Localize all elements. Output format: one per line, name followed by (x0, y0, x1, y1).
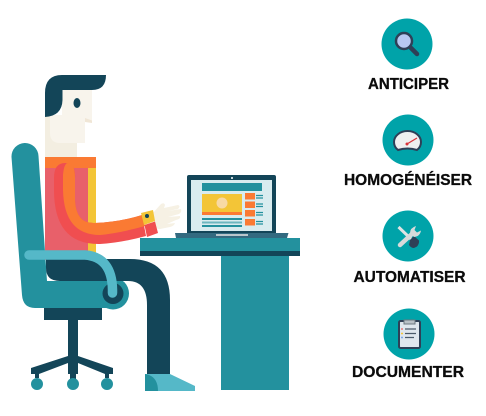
eye (74, 98, 80, 108)
laptop (175, 175, 288, 238)
icon: tools (382, 210, 434, 262)
icon: gauge (382, 114, 434, 166)
armrest (29, 255, 124, 304)
hand (153, 203, 181, 229)
shoe (145, 374, 195, 391)
desk (140, 238, 300, 390)
icon: magnifier (382, 18, 432, 70)
label: homogeneiser: HOMOGÉNÉISER (344, 172, 472, 189)
torso (45, 157, 96, 260)
label: anticiper: ANTICIPER (368, 76, 449, 93)
neck and head (45, 88, 92, 158)
arm (54, 163, 146, 244)
hair (45, 75, 106, 117)
icon: clipboard (384, 308, 434, 360)
chair base (31, 308, 113, 390)
label: documenter: DOCUMENTER (352, 364, 464, 381)
pants (46, 259, 170, 374)
chair back (11, 143, 129, 310)
label: automatiser: AUTOMATISER (354, 269, 466, 286)
cuff (141, 210, 158, 237)
